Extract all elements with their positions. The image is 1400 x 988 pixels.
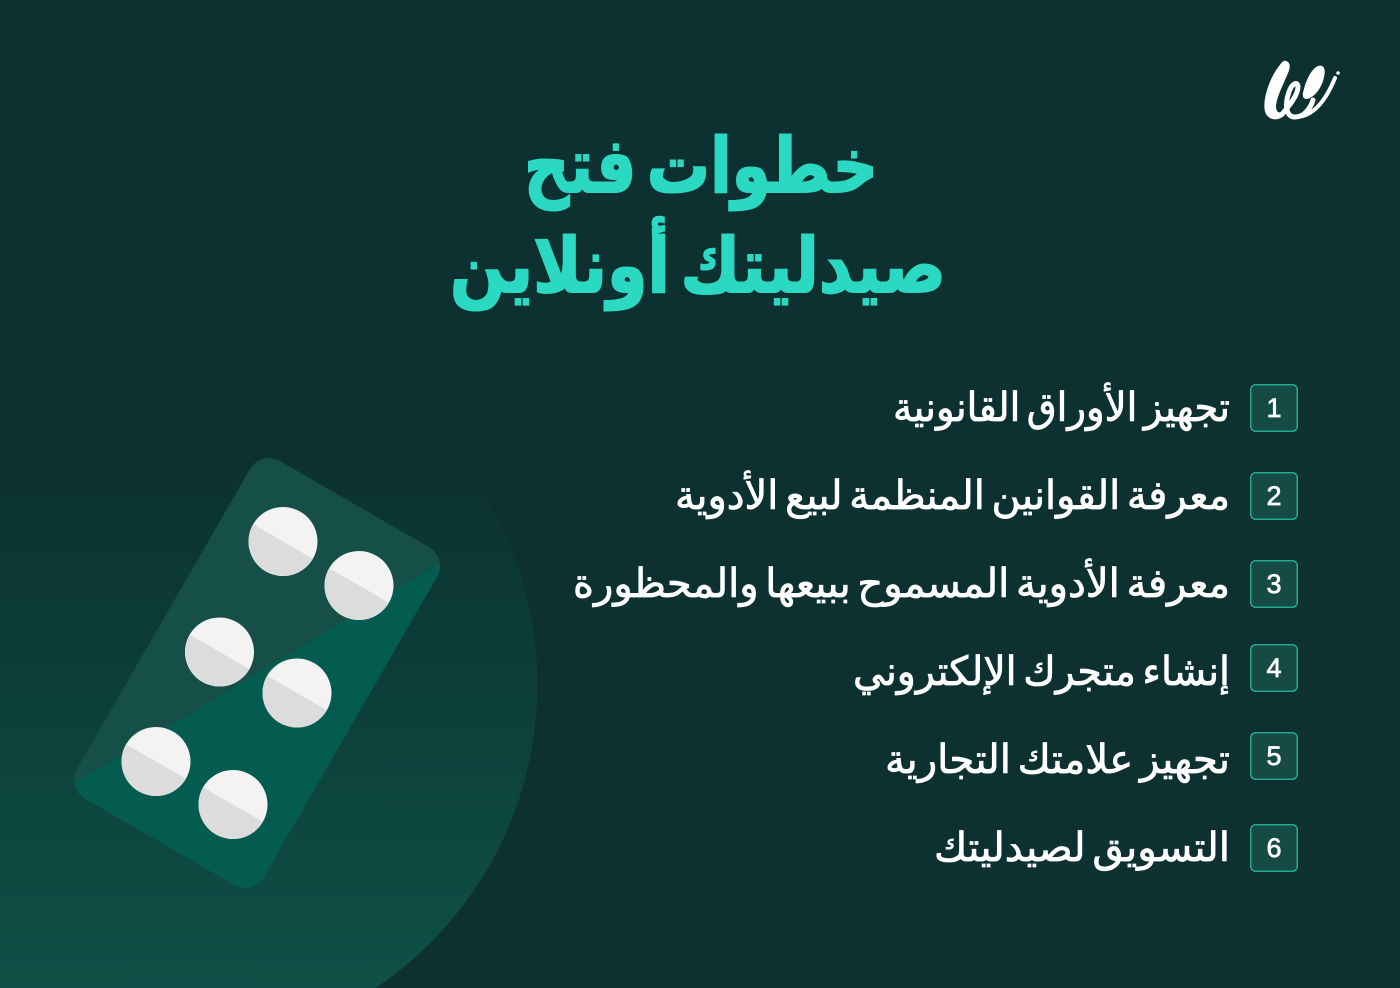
step 4 (853, 645, 1297, 695)
step 4: 4 (1266, 653, 1282, 683)
step 5 text: تجهيز علامتك التجارية (885, 737, 1230, 783)
step 3 (573, 558, 1297, 607)
number badge 2 (1251, 473, 1297, 519)
step 6 text: التسويق لصيدليتك (934, 825, 1230, 871)
step 5: 5 (1266, 741, 1282, 771)
title (450, 121, 946, 311)
step 2 text: معرفة القوانين المنظمة لبيع الأدوية (675, 470, 1230, 519)
step 2 (675, 470, 1297, 519)
step 3: 3 (1266, 569, 1282, 599)
number badge 3 (1251, 561, 1297, 607)
pills (109, 494, 406, 852)
logo letter l (1264, 61, 1290, 119)
number badge 5 (1251, 733, 1297, 779)
logo blade (1303, 66, 1325, 99)
icon: blister pack of pills (66, 450, 448, 896)
number badge 1 (1251, 385, 1297, 431)
logo dot (1336, 71, 1340, 75)
step 1 text: تجهيز الأوراق القانونية (893, 382, 1230, 431)
number badge 6 (1251, 825, 1297, 871)
step 1: 1 (1266, 393, 1282, 423)
number badge 4 (1251, 645, 1297, 691)
step 6 (934, 825, 1297, 871)
logo loop (1283, 84, 1313, 117)
step 4 text: إنشاء متجرك الإلكتروني (853, 649, 1230, 695)
step 3 text: معرفة الأدوية المسموح ببيعها والمحظورة (573, 558, 1230, 607)
step 5 (885, 733, 1297, 783)
blister card (66, 450, 448, 896)
step 1 (893, 382, 1297, 431)
logo tail (1297, 78, 1335, 117)
decorative circle (0, 320, 537, 988)
step 6: 6 (1266, 833, 1282, 863)
logo (1264, 61, 1340, 119)
title line 1: خطوات فتح (524, 121, 878, 211)
title line 2: صيدليتك أونلاين (450, 216, 946, 311)
step 2: 2 (1266, 481, 1282, 511)
